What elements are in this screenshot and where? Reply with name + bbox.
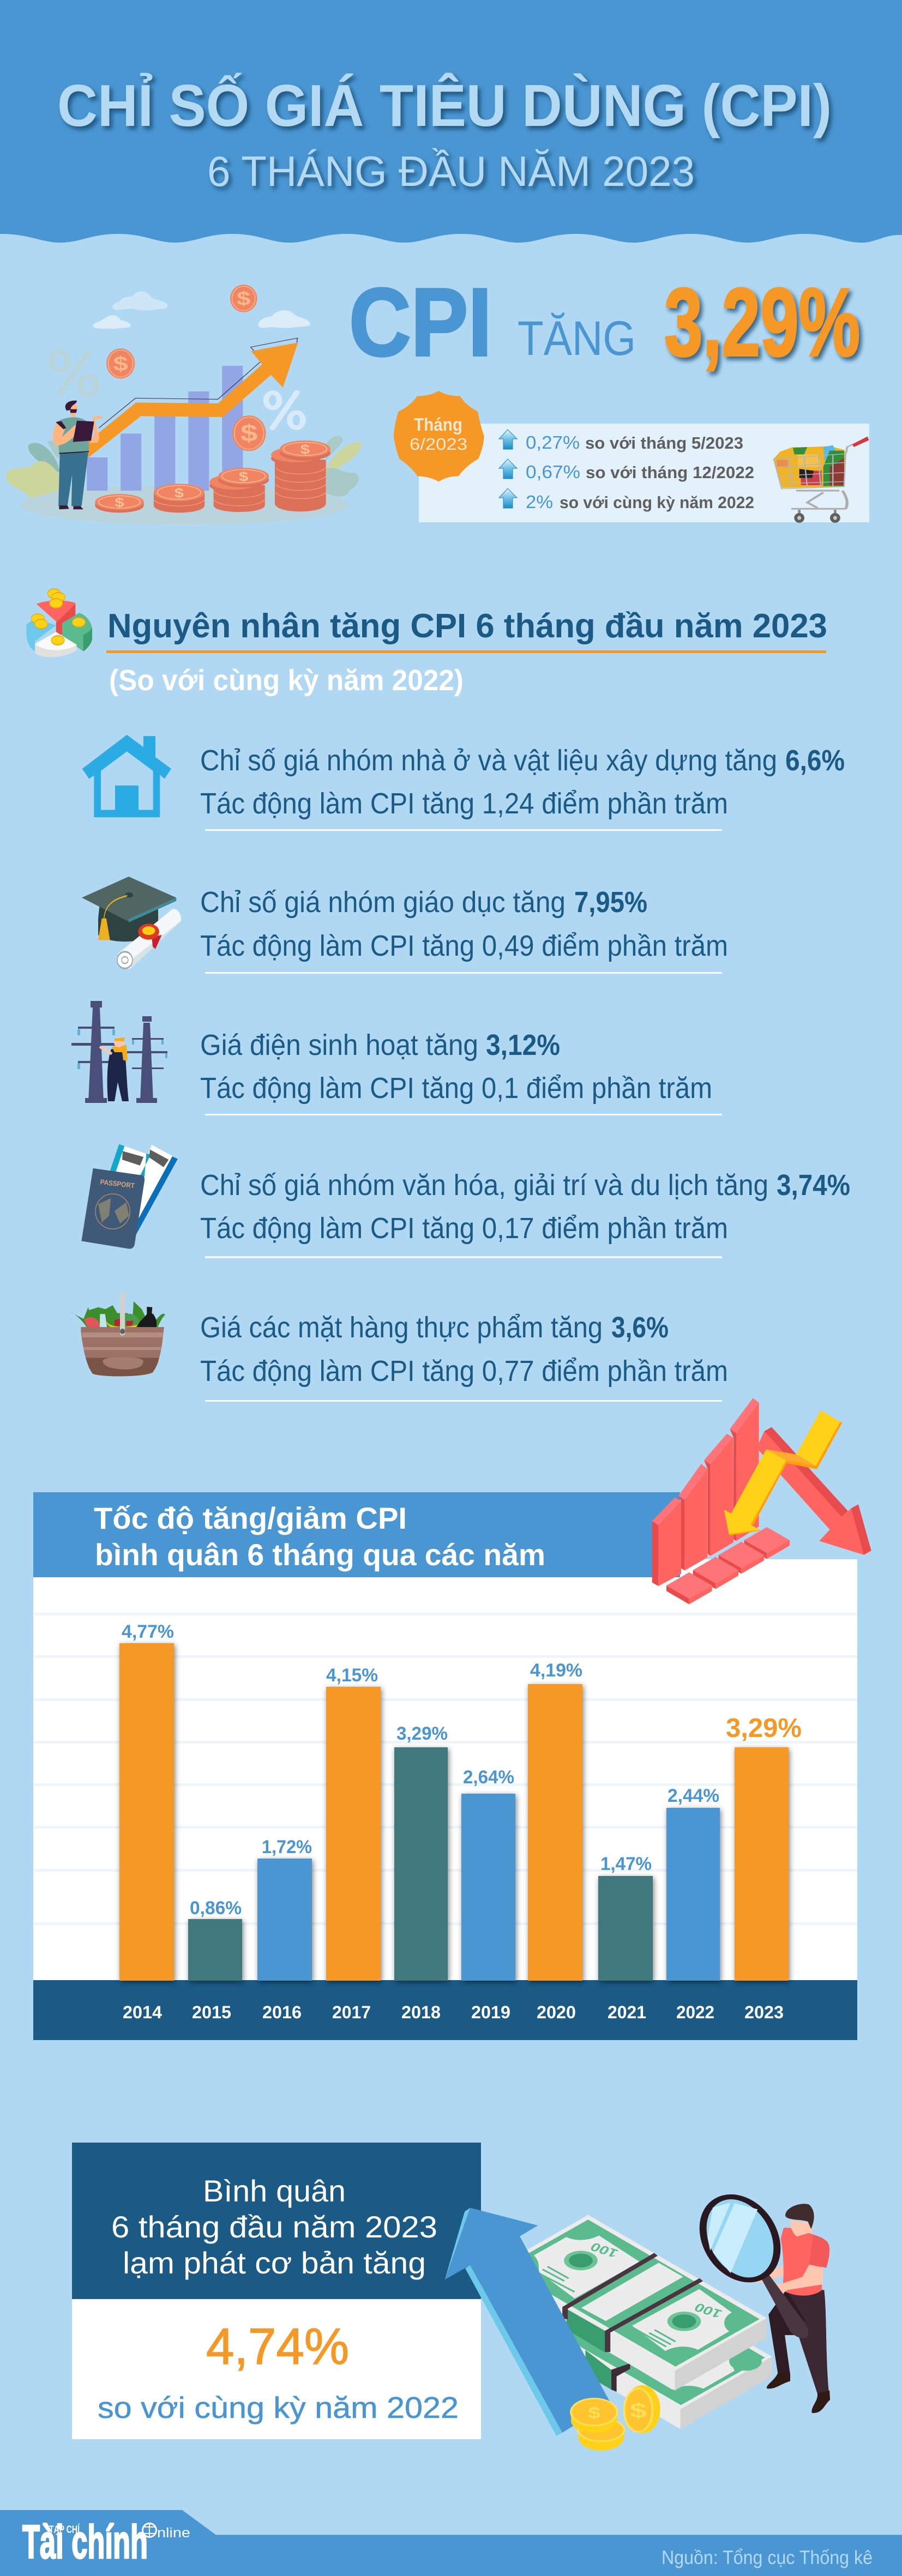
box heading: 6 tháng đầu năm 2023 bbox=[111, 2210, 437, 2244]
logo: TẠP CHÍ bbox=[49, 2524, 80, 2536]
icon: passport and tickets: PASSPORT bbox=[100, 1178, 135, 1190]
row: so với cùng kỳ năm 2022 bbox=[499, 488, 754, 512]
icon: power towers and worker bbox=[71, 1001, 167, 1103]
year axis band bbox=[33, 1980, 857, 2040]
tăng label: TĂNG bbox=[518, 311, 636, 365]
row: so với tháng 12/2022 bbox=[499, 459, 754, 482]
coin stacks: $ bbox=[239, 469, 249, 484]
coin stacks: $ bbox=[300, 442, 310, 456]
coin stacks: $ bbox=[175, 485, 184, 500]
flying coins bbox=[106, 285, 266, 451]
section heading: causes bbox=[26, 589, 827, 697]
year labels: 2015 bbox=[192, 2002, 231, 2022]
source: Nguồn: Tổng cục Thống kê bbox=[662, 2547, 873, 2568]
year labels bbox=[123, 2002, 784, 2022]
coin stacks: $ bbox=[115, 495, 124, 509]
flying coins: $ bbox=[113, 353, 128, 375]
coin stacks bbox=[95, 441, 330, 512]
red tiles bbox=[666, 1527, 790, 1604]
badge: Tháng 6/2023 bbox=[394, 391, 484, 481]
cause 2: education: Tác động làm CPI tăng 0,49 điểm phần trăm bbox=[200, 930, 728, 962]
headline: CPI tăng 3,29% bbox=[349, 268, 860, 376]
value labels: 4,19% bbox=[530, 1660, 582, 1681]
row: so với tháng 5/2023 bbox=[499, 430, 743, 453]
upper bundle bbox=[496, 2215, 767, 2391]
value labels: 3,29% bbox=[396, 1723, 448, 1744]
cause 3: electricity: 3,12% bbox=[486, 1029, 560, 1061]
text: Chỉ số giá nhóm văn hóa, giải trí và du lịch tăng bbox=[200, 1169, 768, 1202]
icon: graduation cap and diploma bbox=[82, 877, 181, 969]
icon: shopping cart bbox=[774, 437, 869, 523]
value labels: 4,15% bbox=[326, 1665, 378, 1686]
icon: pie chart with coins bbox=[26, 589, 92, 657]
illustration: money bundles, arrow and man with magnifier bbox=[445, 2192, 830, 2451]
row: so với tháng 12/2022: so với tháng 12/2022 bbox=[586, 463, 754, 482]
yellow arrow bbox=[724, 1410, 842, 1536]
chart title band bbox=[33, 1492, 680, 1577]
panel: CPI bar chart bbox=[33, 1492, 857, 2040]
illustration: red bars and falling arrows bbox=[652, 1398, 871, 1604]
row: so với cùng kỳ năm 2022: so với cùng kỳ năm 2022 bbox=[560, 493, 754, 512]
year labels: 2014 bbox=[123, 2002, 162, 2022]
leaves bbox=[6, 436, 361, 498]
chart title band: bình quân 6 tháng qua các năm bbox=[95, 1537, 545, 1572]
subtitle: 6 THÁNG ĐẦU NĂM 2023 bbox=[207, 147, 695, 195]
value labels: 1,72% bbox=[262, 1837, 312, 1857]
text: Giá điện sinh hoạt tăng bbox=[200, 1029, 478, 1061]
cause 4: culture and travel: 3,74% bbox=[777, 1169, 850, 1202]
big blue arrow bbox=[445, 2208, 610, 2436]
man with magnifier bbox=[692, 2192, 830, 2413]
red arrow bbox=[759, 1427, 871, 1555]
illustration: growth chart with man and coins bbox=[6, 285, 361, 525]
cause 1: housing: Tác động làm CPI tăng 1,24 điểm phần trăm bbox=[200, 787, 728, 820]
value labels: 3,29% bbox=[726, 1714, 802, 1743]
bars bbox=[119, 1643, 789, 1981]
panel: core inflation bbox=[72, 2143, 481, 2439]
title: CHỈ SỐ GIÁ TIÊU DÙNG (CPI) bbox=[57, 73, 832, 139]
cause 3: electricity: Tác động làm CPI tăng 0,1 điểm phần trăm bbox=[200, 1072, 712, 1105]
cause 3: electricity bbox=[71, 1001, 722, 1115]
cause 1: housing bbox=[82, 735, 845, 831]
row: so với tháng 5/2023: 0,27% bbox=[526, 432, 580, 453]
cause 4: culture and travel: Tác động làm CPI tăng 0,17 điểm phần trăm bbox=[200, 1212, 728, 1245]
box heading bbox=[72, 2143, 481, 2299]
badge: Tháng 6/2023: 6/2023 bbox=[410, 435, 467, 454]
row: so với cùng kỳ năm 2022: 2% bbox=[526, 492, 553, 512]
CPI label: CPI bbox=[349, 268, 492, 376]
man with tablet bbox=[53, 401, 104, 509]
subheading: (So với cùng kỳ năm 2022) bbox=[109, 664, 464, 697]
cause 4: culture and travel bbox=[81, 1144, 850, 1258]
cause 5: food bbox=[70, 1292, 728, 1402]
value labels: 1,47% bbox=[600, 1854, 652, 1874]
gold coins bbox=[571, 2385, 660, 2451]
year labels: 2022 bbox=[676, 2002, 714, 2022]
percent signs bbox=[52, 352, 303, 428]
value labels bbox=[122, 1621, 802, 1919]
flying coins: $ bbox=[237, 287, 251, 309]
row: so với tháng 5/2023: so với tháng 5/2023 bbox=[585, 433, 743, 453]
year labels: 2019 bbox=[471, 2002, 510, 2022]
outline line bbox=[99, 338, 298, 428]
year labels: 2017 bbox=[332, 2002, 371, 2022]
chart title band: Tốc độ tăng/giảm CPI bbox=[94, 1501, 407, 1535]
upper bundle: 100 bbox=[587, 2240, 621, 2260]
value labels: 2,44% bbox=[668, 1785, 719, 1806]
row: so với tháng 12/2022: 0,67% bbox=[526, 462, 580, 482]
text: Chỉ số giá nhóm nhà ở và vật liệu xây dựng tăng bbox=[200, 744, 777, 777]
gold coins: $ bbox=[588, 2404, 600, 2422]
clouds bbox=[93, 291, 310, 329]
year labels: 2018 bbox=[401, 2002, 441, 2022]
trend arrow bbox=[88, 342, 298, 458]
logo: nline bbox=[157, 2525, 190, 2541]
box value: 4,74% bbox=[206, 2318, 349, 2375]
ground bbox=[20, 485, 349, 525]
year labels: 2020 bbox=[537, 2002, 576, 2022]
cause 2: education bbox=[82, 877, 728, 974]
box value: so với cùng kỳ năm 2022 bbox=[98, 2391, 459, 2424]
panel: monthly comparison bbox=[394, 391, 869, 523]
upper bundle: 100 bbox=[691, 2301, 725, 2320]
box value bbox=[72, 2299, 481, 2439]
year labels: 2023 bbox=[744, 2002, 784, 2022]
year labels: 2021 bbox=[608, 2002, 646, 2022]
icon: house bbox=[82, 735, 171, 817]
icon: passport and tickets bbox=[81, 1144, 178, 1249]
cause 5: food: 3,6% bbox=[611, 1311, 669, 1344]
cause 2: education: 7,95% bbox=[574, 886, 647, 919]
icon: food basket bbox=[70, 1292, 165, 1376]
text: Chỉ số giá nhóm giáo dục tăng bbox=[200, 886, 566, 919]
text: Giá các mặt hàng thực phẩm tăng bbox=[200, 1311, 603, 1344]
value labels: 2,64% bbox=[463, 1767, 514, 1788]
box heading: Bình quân bbox=[203, 2174, 346, 2208]
heading text: Nguyên nhân tăng CPI 6 tháng đầu năm 2023 bbox=[107, 607, 827, 645]
header banner bbox=[0, 0, 902, 243]
badge: Tháng 6/2023: Tháng bbox=[414, 414, 462, 435]
gold coins: $ bbox=[630, 2399, 647, 2422]
magnifier bbox=[692, 2192, 808, 2338]
value labels: 0,86% bbox=[190, 1898, 242, 1919]
logo: Tài chính bbox=[22, 2516, 148, 2568]
bars bbox=[87, 366, 243, 491]
value labels: 4,77% bbox=[122, 1621, 174, 1642]
cause 1: housing: 6,6% bbox=[785, 744, 845, 777]
year labels: 2016 bbox=[262, 2002, 302, 2022]
flying coins: $ bbox=[240, 420, 257, 447]
box heading: lạm phát cơ bản tăng bbox=[123, 2246, 426, 2280]
lower bundle bbox=[502, 2253, 772, 2429]
footer band bbox=[0, 2510, 902, 2576]
cause 5: food: Tác động làm CPI tăng 0,77 điểm phần trăm bbox=[200, 1355, 728, 1387]
